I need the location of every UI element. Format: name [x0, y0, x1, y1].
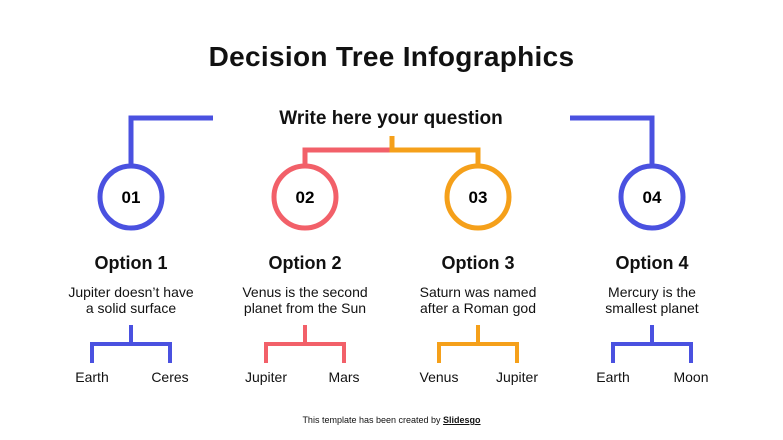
text 3: [420, 284, 536, 316]
option 1: Option 1: [94, 253, 168, 273]
leaf labels: [75, 369, 709, 385]
tree diagram: 03: [469, 188, 487, 207]
connector: red: [305, 150, 392, 165]
leaf labels: Jupiter: [245, 369, 287, 385]
text 1: Jupiter doesn’t have: [68, 284, 194, 300]
circle 04: [621, 166, 683, 228]
leaf labels: Earth: [75, 369, 109, 385]
text 4: [605, 284, 699, 316]
text 4: Mercury is the: [608, 284, 696, 300]
text 3: after a Roman god: [420, 300, 536, 316]
small tree 3: [439, 325, 517, 363]
connector: blue right: [570, 118, 652, 165]
text 1: [68, 284, 194, 316]
circle 01: [100, 166, 162, 228]
title: Decision Tree Infographics: [209, 41, 574, 72]
small tree 2: [266, 325, 344, 363]
text 4: smallest planet: [605, 300, 699, 316]
text 3: Saturn was named: [420, 284, 536, 300]
leaf labels: Moon: [673, 369, 709, 385]
connector: blue left: [131, 118, 213, 165]
option 3: Option 3: [442, 253, 514, 273]
leaf labels: Venus: [420, 369, 458, 385]
small tree 1: [92, 325, 170, 363]
circle 03: [447, 166, 509, 228]
text 2: planet from the Sun: [244, 300, 366, 316]
leaf labels: Earth: [596, 369, 630, 385]
small tree 4: [613, 325, 691, 363]
tree diagram: 02: [296, 188, 314, 207]
leaf labels: Ceres: [151, 369, 189, 385]
option 4: Option 4: [616, 253, 688, 273]
leaf labels: Mars: [328, 369, 360, 385]
circle 02: [274, 166, 336, 228]
tree diagram: 04: [643, 188, 662, 207]
footer credit: This template has been created by Slidesgo: [302, 415, 481, 425]
question: Write here your question: [279, 108, 503, 129]
leaf labels: Jupiter: [496, 369, 538, 385]
connector: orange: [392, 136, 478, 165]
tree diagram: 01: [122, 188, 140, 207]
text 2: Venus is the second: [242, 284, 368, 300]
text 2: [242, 284, 368, 316]
option 2: Option 2: [268, 253, 342, 273]
text 1: a solid surface: [86, 300, 176, 316]
